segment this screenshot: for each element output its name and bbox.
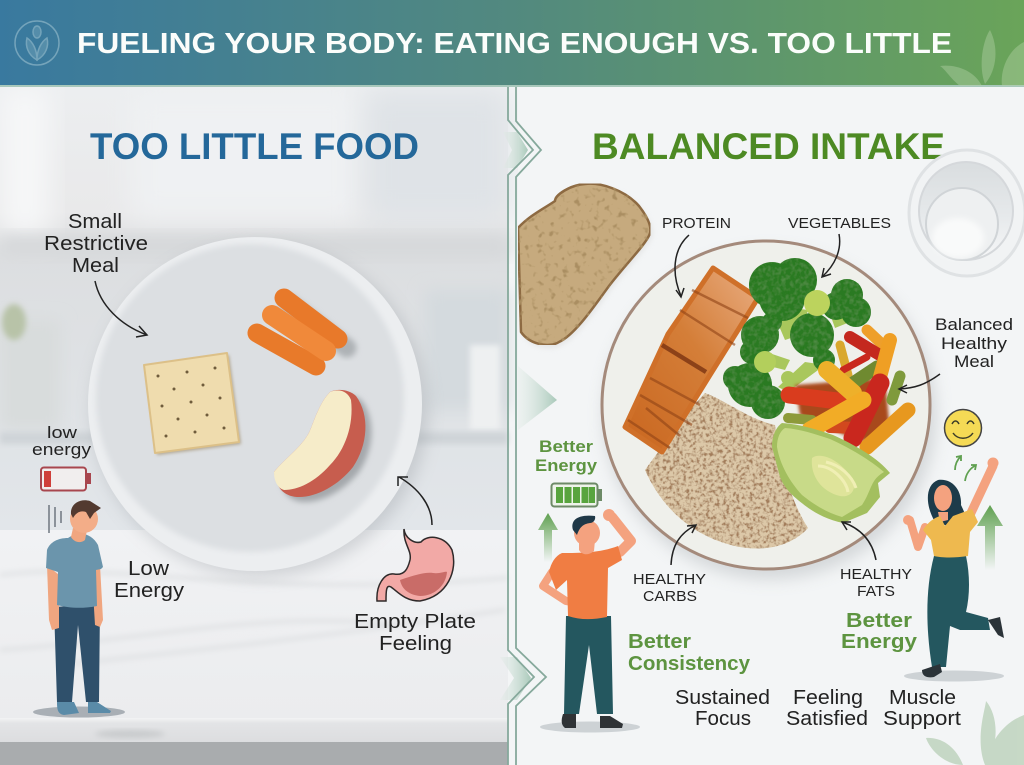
arrows: plate callouts bbox=[671, 234, 940, 565]
bell peppers bbox=[788, 330, 908, 447]
label: small restrictive meal: Small bbox=[68, 211, 122, 233]
label: healthy fats bbox=[840, 566, 912, 600]
label: healthy carbs bbox=[633, 571, 706, 605]
salmon fillet bbox=[625, 268, 758, 452]
label: balanced healthy meal: Healthy bbox=[941, 335, 1008, 353]
icon: small up arrows bbox=[955, 456, 976, 481]
label: healthy carbs: HEALTHY bbox=[633, 571, 706, 588]
arrow: stomach to plate bbox=[398, 477, 432, 525]
heading: too little food: TOO LITTLE FOOD bbox=[90, 126, 419, 167]
icon: full battery bbox=[552, 484, 602, 506]
label: better consistency: Consistency bbox=[628, 653, 751, 675]
label: balanced healthy meal: Meal bbox=[954, 353, 994, 371]
label: better energy: Energy bbox=[841, 631, 918, 653]
panel: too little food background bbox=[0, 86, 508, 765]
label: feeling satisfied: Satisfied bbox=[786, 708, 868, 730]
label: protein: PROTEIN bbox=[662, 215, 731, 232]
arrow: to cracker bbox=[95, 281, 147, 337]
label: sustained focus bbox=[675, 687, 770, 730]
person: tired man bbox=[33, 500, 125, 718]
balanced plate bbox=[602, 241, 936, 579]
icon: header leaves bbox=[940, 30, 1024, 86]
label: feeling satisfied bbox=[786, 687, 868, 730]
label: small restrictive meal: Meal bbox=[72, 255, 119, 277]
label: low energy: Low bbox=[128, 558, 170, 580]
quinoa bbox=[645, 393, 808, 549]
broccoli bbox=[723, 258, 871, 419]
person: happy woman bbox=[903, 458, 1004, 682]
label: small restrictive meal bbox=[44, 211, 148, 277]
label: balanced healthy meal bbox=[935, 316, 1013, 371]
small plate bbox=[88, 237, 428, 577]
panel: balanced intake background bbox=[518, 86, 1024, 765]
label: muscle support: Support bbox=[883, 708, 961, 730]
label: better energy: Better bbox=[846, 610, 912, 632]
label: healthy carbs: CARBS bbox=[643, 588, 697, 605]
label: low energy (battery): low bbox=[47, 424, 77, 442]
label: better consistency bbox=[628, 631, 751, 675]
apple slice bbox=[274, 390, 371, 502]
header banner bbox=[0, 0, 1024, 87]
label: empty plate feeling: Feeling bbox=[379, 633, 452, 655]
label: better energy (battery) bbox=[535, 437, 598, 475]
arrow: up left bbox=[538, 513, 558, 562]
label: feeling satisfied: Feeling bbox=[793, 687, 863, 709]
label: better consistency: Better bbox=[628, 631, 691, 653]
label: empty plate feeling bbox=[354, 611, 476, 655]
arrow: side chevron bbox=[518, 366, 557, 430]
heading: balanced intake: BALANCED INTAKE bbox=[592, 126, 945, 167]
label: small restrictive meal: Restrictive bbox=[44, 233, 148, 255]
icon: header leaf logo bbox=[15, 21, 59, 65]
label: low energy bbox=[114, 558, 184, 602]
carrots bbox=[257, 298, 347, 366]
icon: low battery bbox=[41, 468, 91, 490]
label: healthy fats: HEALTHY bbox=[840, 566, 912, 583]
arrow: up right bbox=[977, 505, 1003, 570]
label: muscle support: Muscle bbox=[889, 687, 956, 709]
label: better energy bbox=[841, 610, 918, 653]
label: sustained focus: Sustained bbox=[675, 687, 770, 709]
label: muscle support bbox=[883, 687, 961, 730]
icon: smiley bbox=[944, 410, 982, 446]
label: healthy fats: FATS bbox=[857, 583, 895, 600]
icon: corner leaves bbox=[926, 701, 1024, 765]
label: sustained focus: Focus bbox=[695, 708, 751, 730]
bread slice bbox=[518, 184, 652, 348]
glass of water bbox=[909, 150, 1024, 276]
icon: stomach bbox=[377, 529, 454, 601]
label: low energy: Energy bbox=[114, 580, 184, 602]
person: strong man bbox=[540, 509, 640, 732]
avocado bbox=[772, 423, 890, 523]
label: low energy (battery) bbox=[32, 424, 92, 459]
label: vegetables: VEGETABLES bbox=[788, 215, 891, 232]
cracker bbox=[144, 353, 241, 455]
label: balanced healthy meal: Balanced bbox=[935, 316, 1013, 334]
label: better energy (battery): Better bbox=[539, 437, 593, 456]
divider with chevrons bbox=[500, 87, 557, 765]
title: FUELING YOUR BODY: EATING ENOUGH VS. TOO LITTLE bbox=[77, 28, 952, 60]
label: better energy (battery): Energy bbox=[535, 456, 598, 475]
label: low energy (battery): energy bbox=[32, 441, 92, 459]
label: empty plate feeling: Empty Plate bbox=[354, 611, 476, 633]
